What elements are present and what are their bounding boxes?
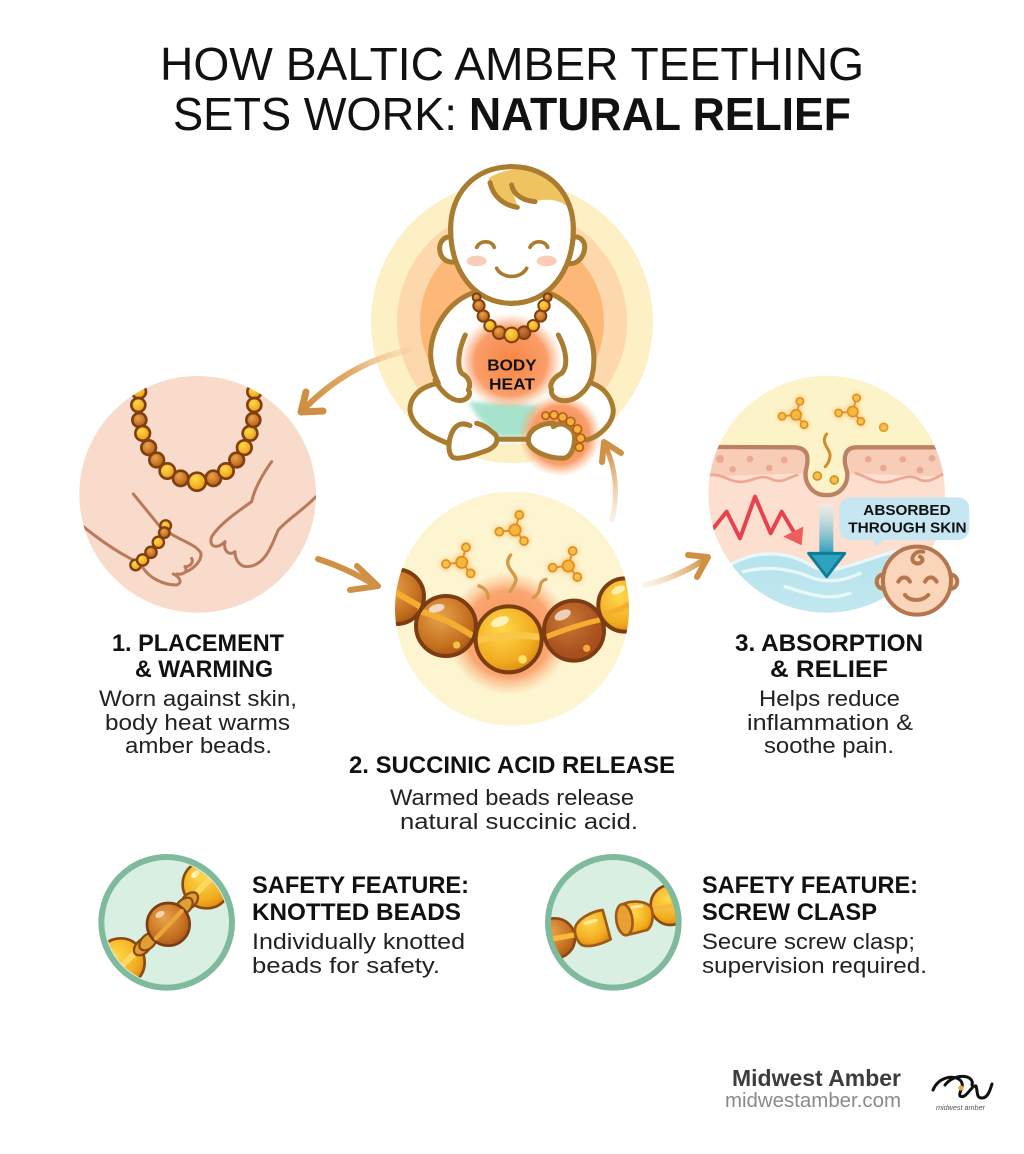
safety text: knotted beads: [252, 872, 469, 978]
title: HOW BALTIC AMBER TEETHING: [160, 38, 864, 90]
title: NATURAL RELIEF: [469, 88, 851, 140]
pain signal arrow: [713, 497, 803, 545]
step 3 text: soothe pain.: [764, 733, 894, 758]
footer brand: Midwest Amber: [732, 1065, 901, 1091]
center bead: [147, 903, 190, 946]
vapour wisps: [479, 555, 546, 598]
safety text: knotted beads: SAFETY FEATURE:: [252, 872, 469, 899]
water layer: [732, 554, 894, 613]
step 1 text: & WARMING: [135, 656, 273, 683]
amber necklace: [473, 293, 552, 342]
skin pores: [716, 455, 935, 473]
panel: absorption illustration: [700, 370, 969, 623]
label: body heat: BODY: [487, 358, 537, 375]
step 2 text: [349, 752, 675, 834]
panel: release illustration: [395, 492, 629, 726]
title: [160, 38, 864, 140]
succinic acid molecules: [441, 510, 583, 582]
callout: absorbed through skin: THROUGH SKIN: [848, 519, 967, 536]
knots: [132, 891, 200, 956]
panel: placement illustration: [79, 376, 316, 613]
absorption arrow: [809, 503, 845, 577]
title: SETS WORK:: [173, 88, 457, 140]
icon: baby face: [877, 547, 957, 615]
step 1 text: amber beads.: [125, 733, 272, 758]
logo: midwest amber: [933, 1076, 992, 1112]
footer brand: [725, 1065, 901, 1112]
molecules: [777, 393, 888, 484]
arrow: placement to release: [318, 559, 378, 590]
baby head: [440, 167, 585, 303]
icon: screw clasp: [535, 857, 691, 988]
safety text: screw clasp: [702, 872, 927, 978]
ankle bracelet: [542, 411, 585, 451]
big amber beads: [395, 570, 629, 670]
clasp beads: [551, 885, 676, 958]
outer beads: [108, 866, 224, 978]
step 1 text: Worn against skin,: [99, 686, 297, 711]
arms and hands: [83, 462, 316, 585]
safety text: knotted beads: beads for safety.: [252, 953, 440, 978]
skin surface: [710, 447, 943, 495]
arrow: baby to placement: [301, 350, 410, 412]
illustration: baby with body heat: [371, 167, 653, 477]
step 3 text: [735, 630, 923, 758]
baby body: [410, 293, 613, 477]
icon: knotted beads: [97, 857, 232, 988]
arrow: release to baby: [602, 442, 621, 520]
step 1 text: body heat warms: [105, 710, 290, 735]
heat rings: [371, 181, 653, 463]
step 2 text: natural succinic acid.: [400, 809, 638, 834]
step 3 text: 3. ABSORPTION: [735, 630, 923, 657]
safety text: screw clasp: SCREW CLASP: [702, 899, 877, 926]
necklace beads: [131, 385, 261, 491]
safety text: screw clasp: SAFETY FEATURE:: [702, 872, 918, 899]
bead outlines: [396, 568, 628, 674]
clasp right half: [614, 902, 653, 936]
step 3 text: & RELIEF: [770, 656, 888, 683]
logo: midwest amber: midwest amber: [936, 1103, 985, 1112]
callout: absorbed through skin: ABSORBED: [863, 502, 951, 519]
heat glow: [454, 574, 562, 693]
step 2 text: 2. SUCCINIC ACID RELEASE: [349, 752, 675, 779]
bead streaks and highlights: [396, 584, 629, 664]
step 1 text: [99, 630, 297, 758]
air layer: [718, 376, 934, 493]
step 3 text: inflammation &: [747, 710, 913, 735]
label: body heat: [487, 358, 537, 393]
step 1 text: 1. PLACEMENT: [112, 630, 284, 657]
safety text: knotted beads: KNOTTED BEADS: [252, 899, 461, 926]
arrow: release to absorption: [645, 555, 708, 585]
safety text: screw clasp: supervision required.: [702, 953, 927, 978]
skin epidermis: [700, 449, 953, 477]
callout: absorbed through skin: [839, 497, 969, 547]
footer brand: midwestamber.com: [725, 1090, 901, 1112]
clasp left half: [575, 910, 611, 946]
step 3 text: Helps reduce: [759, 686, 900, 711]
label: body heat: HEAT: [489, 376, 535, 393]
safety text: knotted beads: Individually knotted: [252, 929, 465, 954]
safety text: screw clasp: Secure screw clasp;: [702, 929, 915, 954]
step 2 text: Warmed beads release: [390, 785, 634, 810]
bracelet beads: [130, 520, 171, 570]
